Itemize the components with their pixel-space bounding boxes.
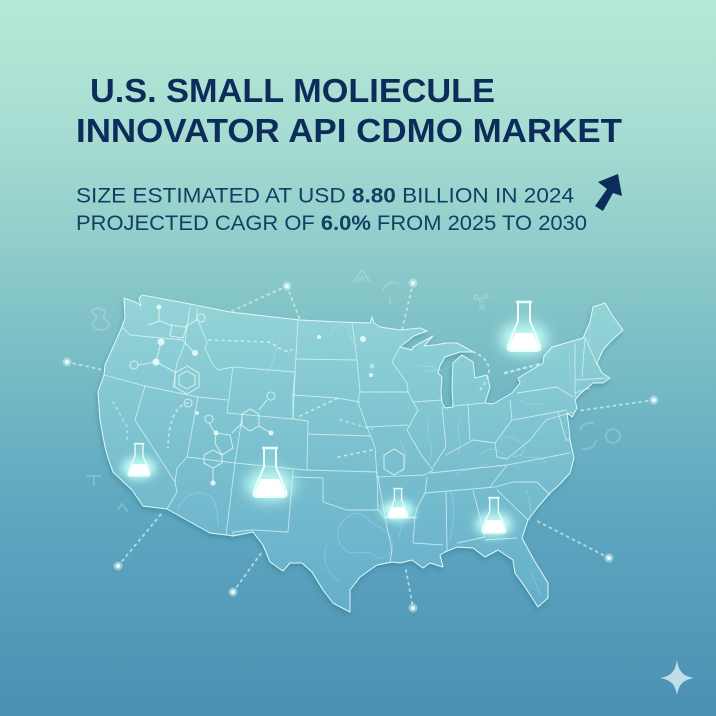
market size and CAGR text: SIZE ESTIMATED AT USD 8.80 BILLION IN 2024 [76, 184, 574, 208]
connector end nodes [62, 278, 658, 612]
icon: flask in New Mexico [246, 448, 294, 501]
molecule diagrams [130, 307, 404, 483]
map of the United States [62, 278, 658, 612]
market size and CAGR text [76, 184, 587, 235]
terrain contour lines [178, 320, 591, 594]
faint background symbols [87, 270, 620, 512]
icon: four-point sparkle [660, 660, 694, 695]
market size and CAGR text: PROJECTED CAGR OF 6.0% FROM 2025 TO 2030 [76, 211, 587, 235]
dotted connector lines [67, 283, 654, 608]
title: INNOVATOR API CDMO MARKET [76, 113, 623, 150]
icon: flask in Georgia [475, 498, 513, 537]
title [76, 73, 623, 150]
country outline [98, 295, 623, 612]
icon: flask over Great Lakes [500, 302, 548, 355]
icon: flask in Arkansas [381, 489, 415, 522]
state borders [104, 307, 607, 563]
title: U.S. SMALL MOLIECULE [90, 73, 495, 110]
icon: flask in California [122, 444, 156, 479]
molecule nodes [152, 304, 374, 486]
icon: growth arrow [595, 174, 622, 211]
